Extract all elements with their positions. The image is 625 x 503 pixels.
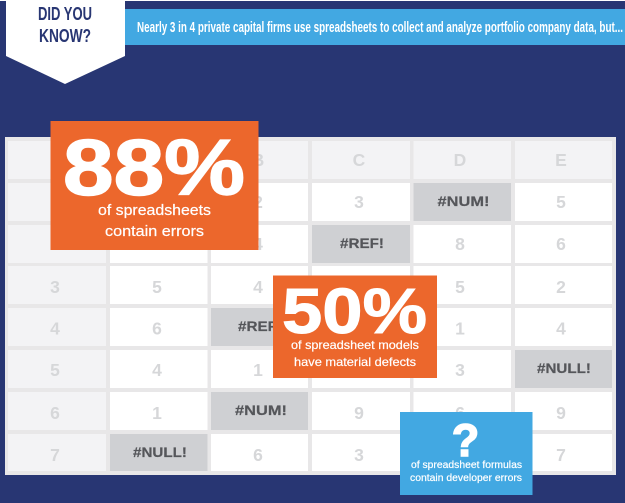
banner <box>125 9 625 45</box>
row 7: 3 <box>354 445 364 465</box>
row 6: 9 <box>556 403 566 423</box>
row 5: 1 <box>253 360 263 380</box>
row 2: 4 <box>253 234 263 254</box>
row 4: 4 <box>50 318 60 338</box>
callout: 50%: of spreadsheet models <box>291 338 419 352</box>
callout: 50% <box>273 275 437 378</box>
callout: 88%: of spreadsheets <box>98 202 211 219</box>
row 1: 7 <box>152 192 162 212</box>
row 3: 4 <box>253 277 263 297</box>
header row: C <box>353 150 366 170</box>
row 6 <box>8 392 612 430</box>
row 2: #REF! <box>340 236 384 251</box>
row 5: 3 <box>455 360 465 380</box>
row 6: 6 <box>455 403 465 423</box>
row 2: 2 <box>50 234 60 254</box>
row 5 <box>8 350 612 388</box>
header row: D <box>454 150 466 170</box>
callout: 88% <box>50 121 258 250</box>
row 4: 1 <box>455 318 465 338</box>
row 2: 6 <box>556 234 566 254</box>
row 6: 1 <box>152 403 162 423</box>
row 4: 4 <box>556 318 566 338</box>
row 7: 7 <box>556 445 566 465</box>
row 5: #NULL! <box>537 361 591 376</box>
row 7: 6 <box>253 445 263 465</box>
row 3: 5 <box>455 277 465 297</box>
row 1: 1 <box>50 192 60 212</box>
row 7: 7 <box>50 445 60 465</box>
callout: question mark: ? <box>452 415 479 466</box>
row 2 <box>8 225 612 263</box>
row 1: 5 <box>556 192 566 212</box>
callout: 50%: 50% <box>282 275 427 347</box>
row 6: #NUM! <box>235 403 287 418</box>
row 1: 3 <box>354 192 364 212</box>
row 2: 9 <box>152 234 162 254</box>
callout: question mark: contain developer errors <box>410 473 522 484</box>
row 4 <box>8 308 612 346</box>
row 7 <box>8 434 612 471</box>
badge: did you know: DID YOU <box>38 4 92 24</box>
header row: B <box>252 150 264 170</box>
row 3 <box>8 266 612 304</box>
spreadsheet table <box>5 137 616 475</box>
row 6: 6 <box>50 403 60 423</box>
callout: 88%: contain errors <box>105 223 204 240</box>
row 3: 3 <box>50 277 60 297</box>
row 1 <box>8 183 612 221</box>
header row <box>8 141 612 179</box>
row 2: 8 <box>455 234 465 254</box>
callout: 50%: have material defects <box>294 355 416 369</box>
row 6: 9 <box>354 403 364 423</box>
callout: 88%: 88% <box>63 122 245 212</box>
row 5: 5 <box>50 360 60 380</box>
row 7: #NULL! <box>133 445 187 460</box>
row 5: 4 <box>152 360 162 380</box>
badge: did you know <box>6 0 125 84</box>
row 4: 6 <box>152 318 162 338</box>
header row: E <box>555 150 567 170</box>
callout: question mark <box>400 412 532 495</box>
callout: question mark: of spreadsheet formulas <box>411 460 522 471</box>
row 3: 5 <box>152 277 162 297</box>
row 1: #NUM! <box>438 194 490 209</box>
row 3: 2 <box>556 277 566 297</box>
row 4: #REF! <box>238 319 282 334</box>
badge: did you know: KNOW? <box>39 26 91 46</box>
row 1: 2 <box>253 192 263 212</box>
header row: A <box>151 150 164 170</box>
